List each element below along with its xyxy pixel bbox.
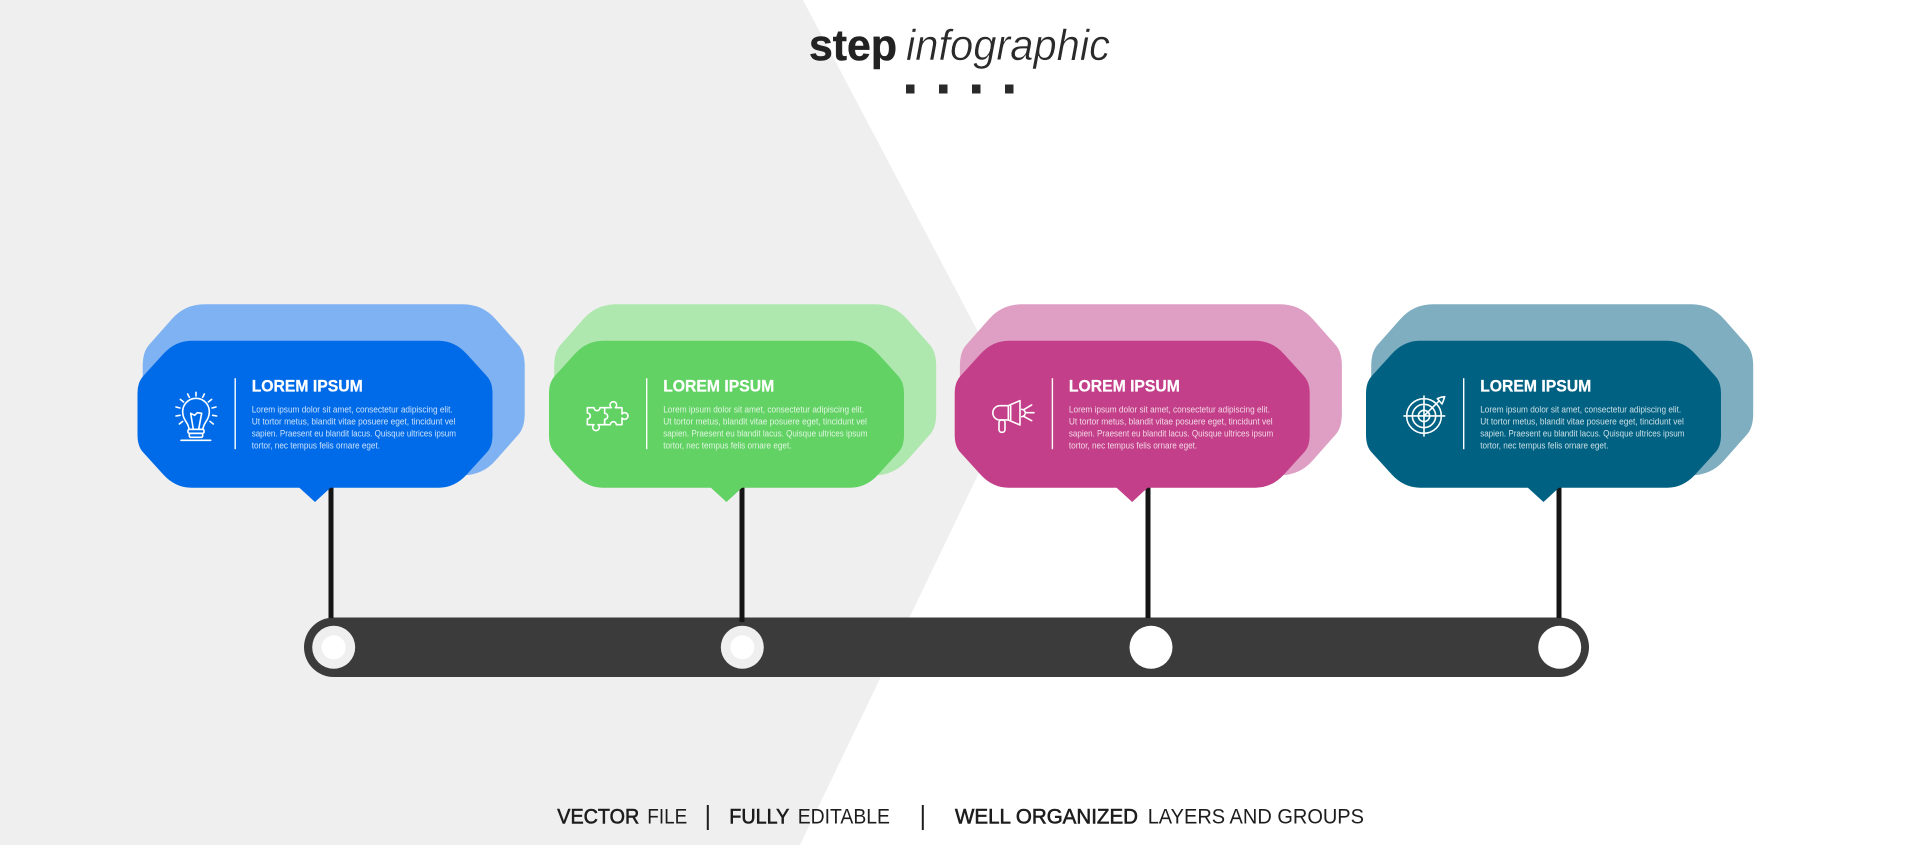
body text: sapien. Praesent eu blandit lacus. Quisque ultrices ipsum xyxy=(663,429,868,440)
panel: step 1 blue xyxy=(138,304,525,502)
back shape xyxy=(554,304,936,475)
body text: tortor, nec tempus felis ornare eget. xyxy=(252,441,380,452)
body text xyxy=(1069,405,1273,452)
footer tagline: EDITABLE xyxy=(798,806,890,828)
pointer xyxy=(710,487,743,502)
background: gray arrow panel xyxy=(0,0,1014,845)
body text xyxy=(663,405,868,452)
body text: Ut tortor metus, blandit vitae posuere eget, tincidunt vel xyxy=(1480,417,1684,428)
heading: LOREM IPSUM xyxy=(252,378,363,396)
front shape xyxy=(1366,341,1721,488)
title squares xyxy=(906,84,1014,94)
heading: LOREM IPSUM xyxy=(663,378,774,396)
title: infographic xyxy=(906,21,1110,70)
back shape xyxy=(1371,304,1753,475)
body text: Ut tortor metus, blandit vitae posuere eget, tincidunt vel xyxy=(1069,417,1273,428)
icon: light bulb xyxy=(176,392,217,440)
footer tagline: LAYERS AND GROUPS xyxy=(1148,806,1364,828)
pointer xyxy=(298,487,332,502)
footer tagline: VECTOR xyxy=(557,806,639,828)
title xyxy=(809,21,1110,70)
timeline node 4 xyxy=(1538,626,1581,669)
timeline bar xyxy=(304,618,1589,677)
divider xyxy=(234,378,236,449)
panel: step 4 teal xyxy=(1366,304,1753,502)
pointer xyxy=(1527,487,1560,502)
divider xyxy=(1052,378,1053,449)
connector stems xyxy=(328,480,1562,622)
body text: sapien. Praesent eu blandit lacus. Quisque ultrices ipsum xyxy=(1480,429,1684,440)
footer tagline: FULLY xyxy=(729,806,789,828)
body text xyxy=(1480,405,1684,452)
panel: step 3 magenta xyxy=(955,304,1342,502)
body text: Lorem ipsum dolor sit amet, consectetur adipiscing elit. xyxy=(252,405,453,416)
body text: Ut tortor metus, blandit vitae posuere eget, tincidunt vel xyxy=(663,417,867,428)
heading: LOREM IPSUM xyxy=(1480,378,1591,396)
icon: puzzle xyxy=(587,402,628,431)
footer tagline: FILE xyxy=(647,806,687,828)
front shape xyxy=(138,341,492,488)
body text: tortor, nec tempus felis ornare eget. xyxy=(663,441,792,452)
body text: Lorem ipsum dolor sit amet, consectetur adipiscing elit. xyxy=(1480,405,1681,416)
timeline node 1 xyxy=(312,626,355,669)
body text: sapien. Praesent eu blandit lacus. Quisque ultrices ipsum xyxy=(252,429,456,440)
body text: Lorem ipsum dolor sit amet, consectetur adipiscing elit. xyxy=(663,405,864,416)
timeline node 3 xyxy=(1130,626,1172,669)
back shape xyxy=(143,304,525,475)
footer tagline xyxy=(557,805,1364,830)
body text: Lorem ipsum dolor sit amet, consectetur adipiscing elit. xyxy=(1069,405,1270,416)
front shape xyxy=(955,341,1310,488)
divider xyxy=(1463,378,1464,449)
timeline node 2 xyxy=(721,626,764,669)
footer tagline: WELL ORGANIZED xyxy=(955,806,1138,828)
heading: LOREM IPSUM xyxy=(1069,378,1180,396)
body text: tortor, nec tempus felis ornare eget. xyxy=(1069,441,1197,452)
divider xyxy=(646,378,647,449)
pointer xyxy=(1116,487,1149,502)
back shape xyxy=(960,304,1342,475)
panel: step 2 green xyxy=(549,304,936,502)
body text: sapien. Praesent eu blandit lacus. Quisque ultrices ipsum xyxy=(1069,429,1273,440)
body text: tortor, nec tempus felis ornare eget. xyxy=(1480,441,1608,452)
front shape xyxy=(549,341,904,488)
icon: megaphone xyxy=(993,401,1034,432)
icon: target xyxy=(1404,396,1445,436)
body text xyxy=(252,405,456,452)
title: step xyxy=(809,21,897,70)
body text: Ut tortor metus, blandit vitae posuere eget, tincidunt vel xyxy=(252,417,455,428)
